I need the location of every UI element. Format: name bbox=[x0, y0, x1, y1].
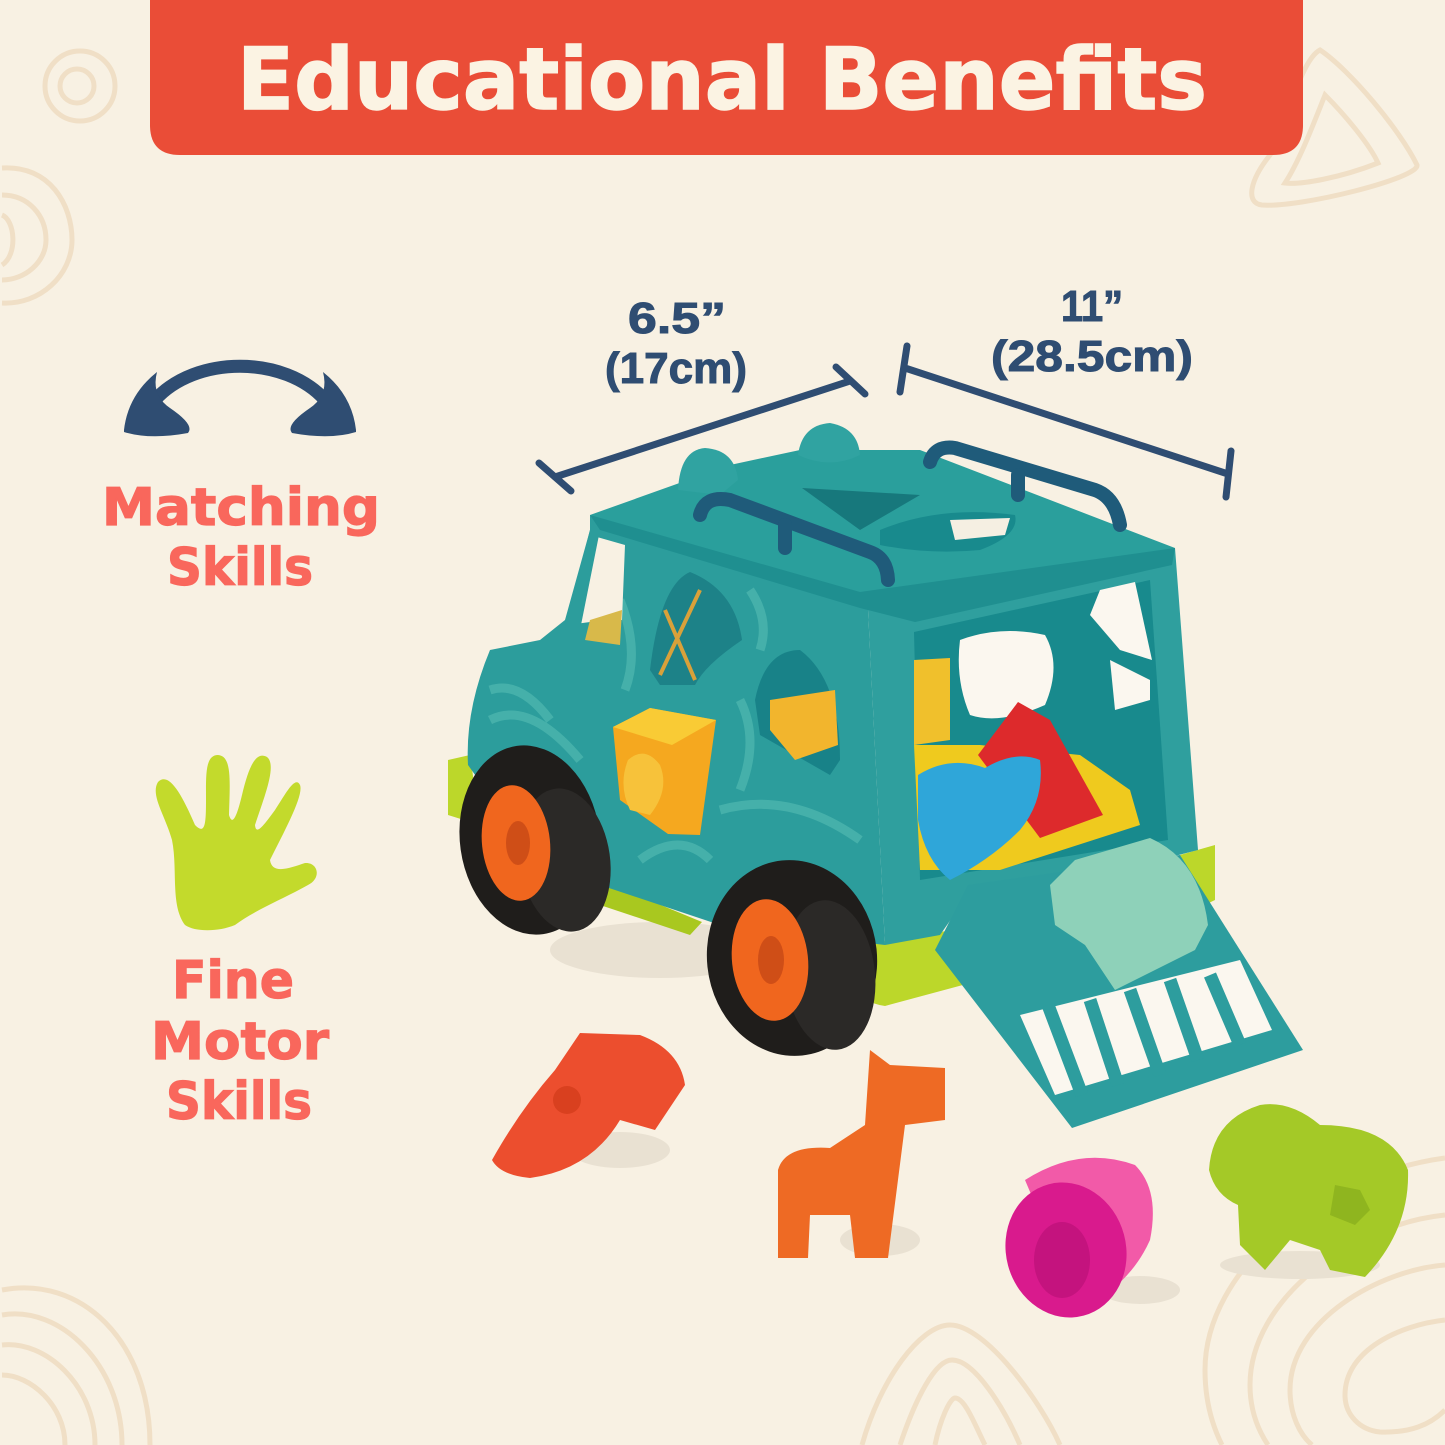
yellow block in door bbox=[613, 708, 716, 835]
rear wheel bbox=[447, 736, 620, 944]
toy: green hippo bbox=[1209, 1104, 1408, 1277]
dimension: width: (17cm) bbox=[605, 344, 747, 393]
body lighter stripes bbox=[490, 590, 860, 860]
dimension: length: 11” bbox=[1061, 282, 1123, 331]
label: fine motor skills: Fine bbox=[172, 951, 294, 1011]
dimension: width: 6.5” bbox=[628, 294, 726, 343]
dimension: length bbox=[900, 282, 1231, 497]
roof bbox=[590, 450, 1175, 622]
interior windows bbox=[959, 631, 1054, 718]
side windows bbox=[650, 572, 742, 685]
chameleon block bbox=[918, 756, 1041, 880]
title text: Educational Benefits bbox=[237, 30, 1207, 130]
toy: pink cylinder bbox=[990, 1158, 1153, 1331]
body side bbox=[468, 515, 885, 945]
label: fine motor skills: Motor bbox=[151, 1012, 329, 1072]
triangle block bbox=[978, 702, 1103, 838]
toy: red bird bbox=[492, 1033, 685, 1178]
ramp bbox=[935, 855, 1303, 1128]
rear opening bbox=[914, 580, 1168, 880]
shadows bbox=[550, 922, 1380, 1304]
toy: orange giraffe bbox=[778, 1050, 945, 1258]
dimension: width bbox=[539, 294, 865, 491]
toy truck bbox=[447, 423, 1303, 1128]
roof shape holes bbox=[802, 488, 920, 530]
roof rails bbox=[700, 448, 1120, 580]
roof bumps bbox=[678, 448, 738, 495]
front window bbox=[568, 535, 625, 625]
front wheel bbox=[697, 852, 887, 1064]
label: matching skills bbox=[102, 478, 380, 598]
yellow interior bbox=[914, 658, 950, 745]
lime base bbox=[448, 755, 480, 825]
label: matching skills: Skills bbox=[167, 538, 313, 598]
rear frame bbox=[860, 548, 1198, 945]
mint block bbox=[1050, 838, 1208, 990]
title banner bbox=[150, 0, 1303, 155]
icon: hand bbox=[156, 755, 317, 930]
label: matching skills: Matching bbox=[102, 478, 380, 538]
label: fine motor skills: Skills bbox=[166, 1072, 312, 1132]
icon: matching skills double arrow bbox=[124, 366, 356, 436]
step bbox=[600, 882, 702, 935]
label: fine motor skills bbox=[151, 951, 329, 1132]
dimension: length: (28.5cm) bbox=[991, 332, 1193, 381]
